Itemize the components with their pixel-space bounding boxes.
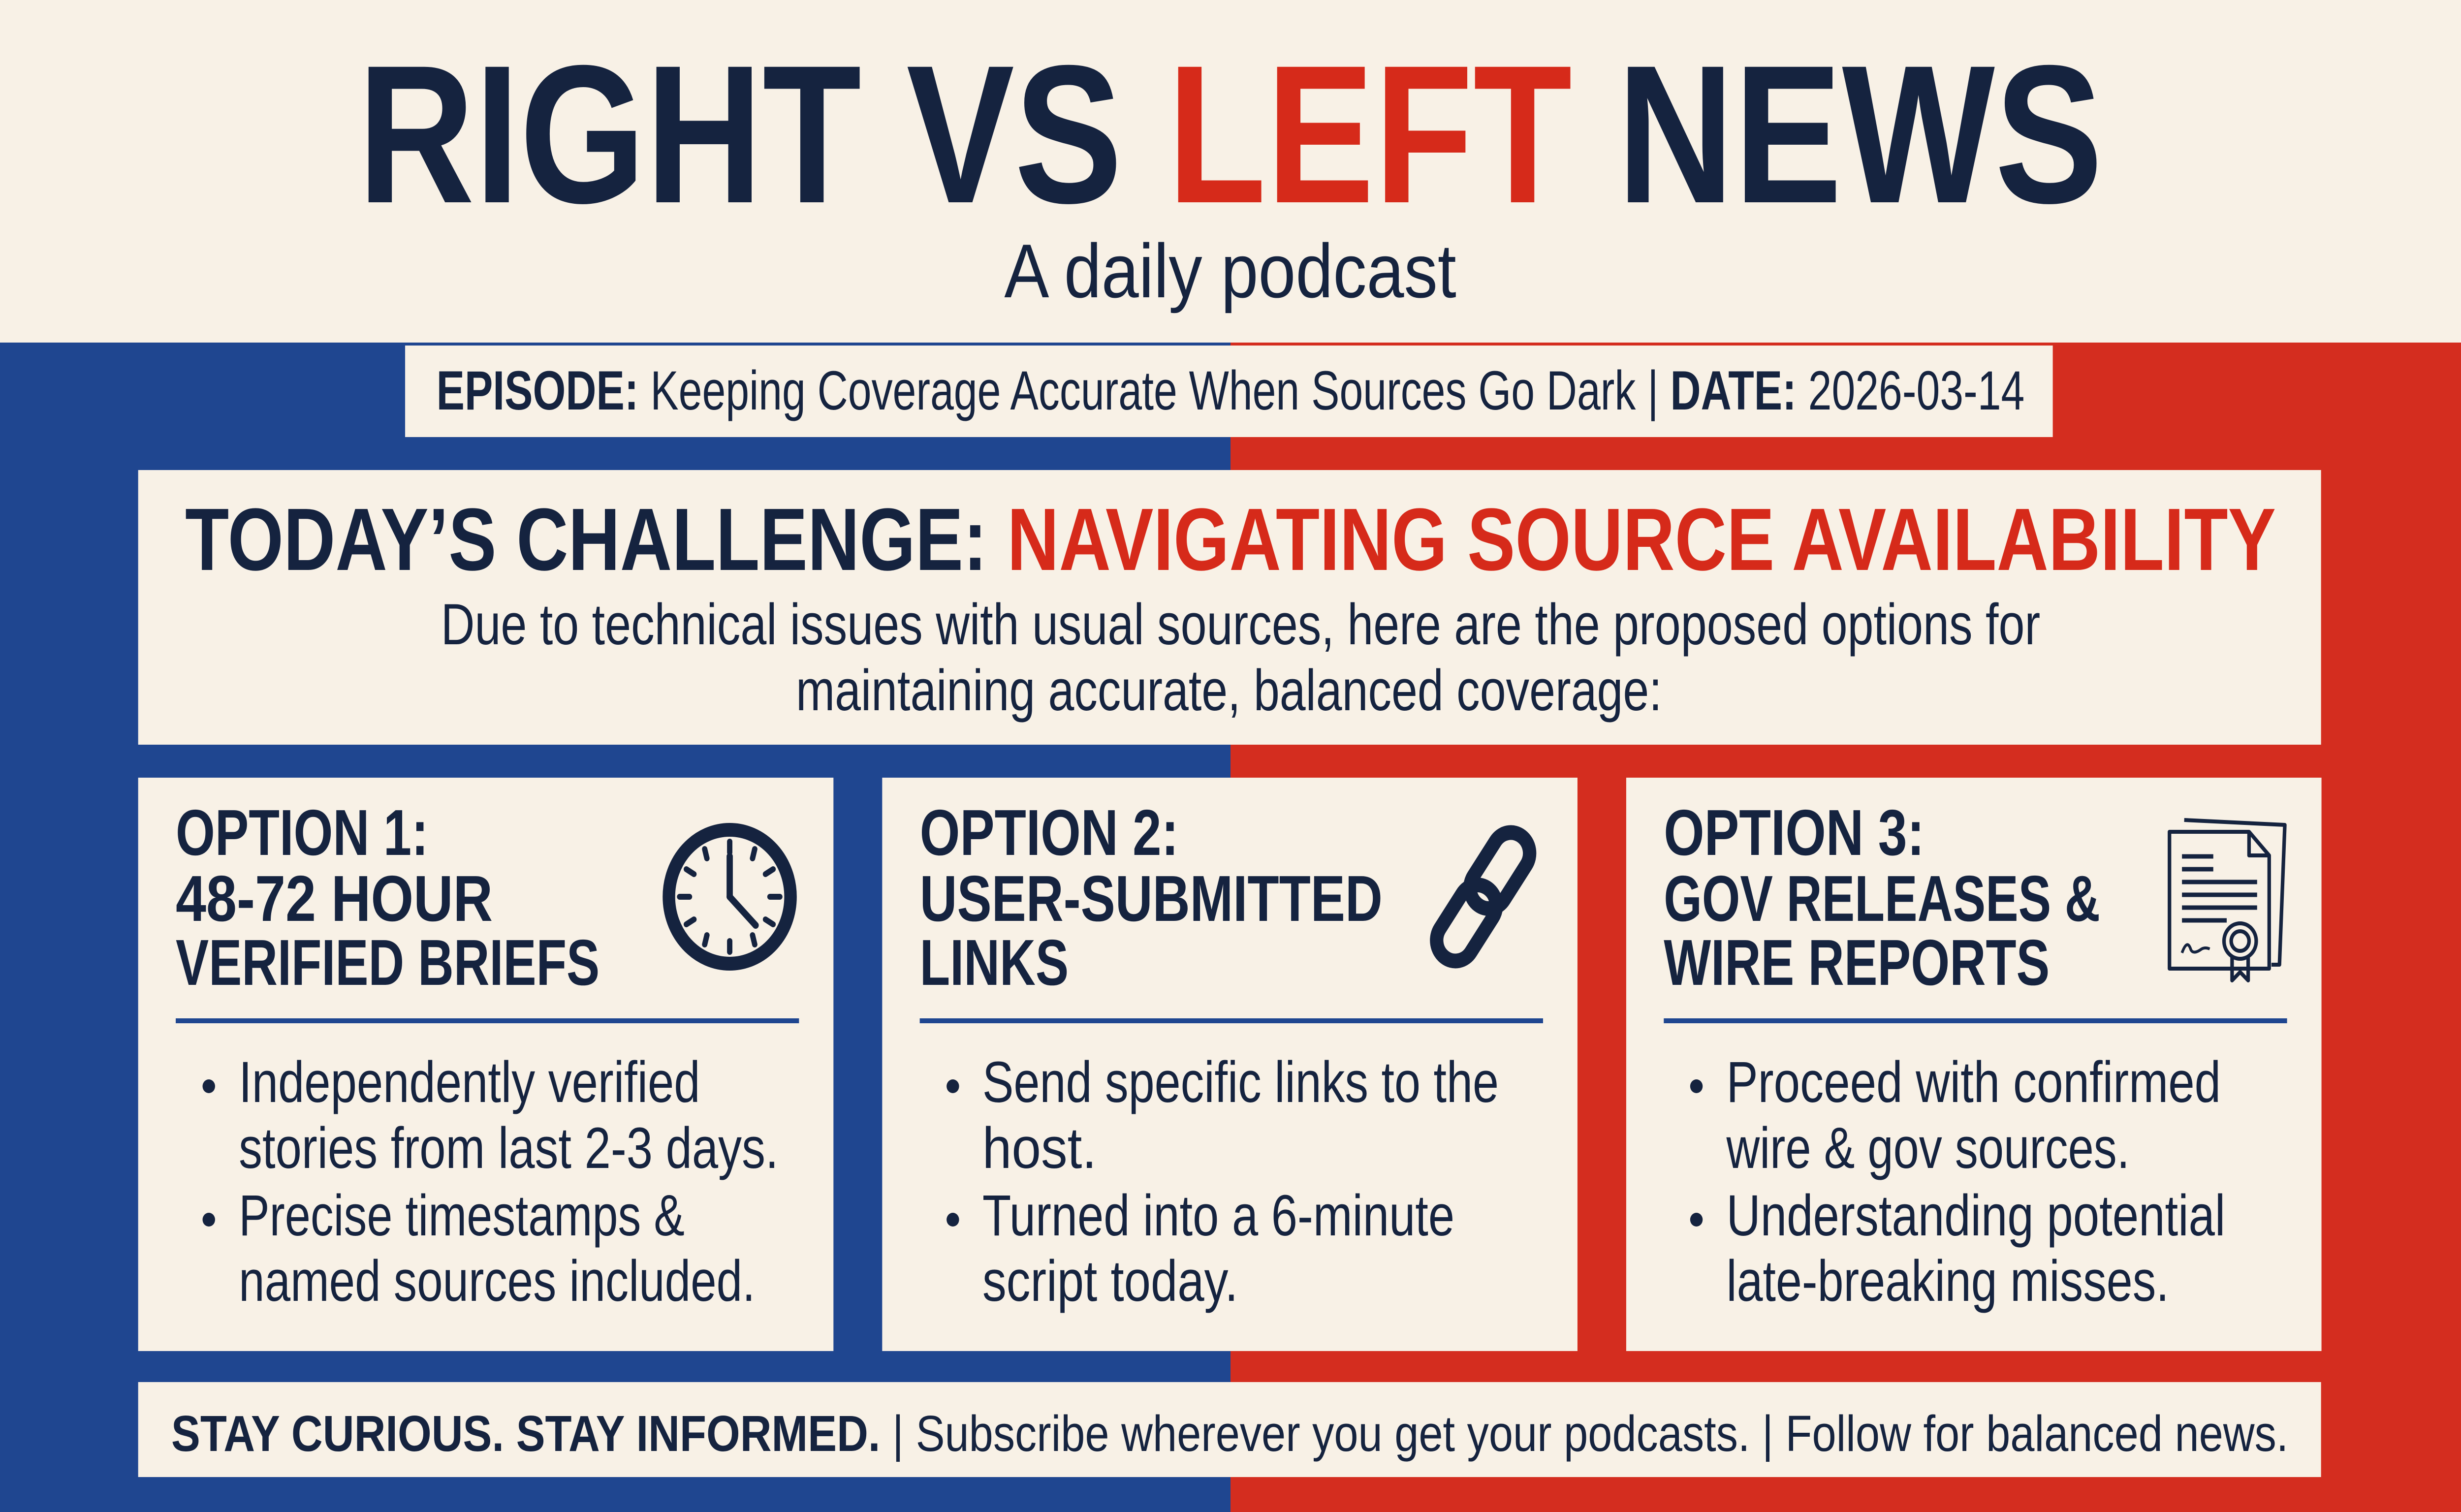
- episode text: EPISODE: Keeping Coverage Accurate When Sources Go Dark | DATE: 2026-03-14: [437, 359, 2024, 421]
- panel: option 3: [1626, 778, 2322, 1351]
- option 1 heading: [176, 796, 599, 999]
- challenge description: [441, 592, 2040, 723]
- panel: option 2: [882, 778, 1578, 1351]
- footer bar: [138, 1382, 2321, 1477]
- option 2 heading: LINKS: [920, 926, 1069, 999]
- option 3 heading: GOV RELEASES &: [1664, 862, 2100, 935]
- background: cream top band: [0, 0, 2461, 343]
- option 2 heading: OPTION 2:: [920, 796, 1179, 869]
- option 3 heading: [1664, 796, 2100, 999]
- option 2 bullets: Send specific links to the: [982, 1049, 1499, 1114]
- challenge description: Due to technical issues with usual sources, here are the proposed options for: [441, 592, 2040, 657]
- background: blue left half: [0, 343, 1230, 1512]
- icon: chain link: [1429, 824, 1537, 969]
- divider: [176, 1018, 799, 1023]
- option 1 bullets: named sources included.: [239, 1248, 755, 1313]
- option 2 bullets: host.: [982, 1115, 1097, 1180]
- option 3 bullets: [1690, 1049, 2225, 1313]
- divider: [1664, 1018, 2287, 1023]
- footer text: STAY CURIOUS. STAY INFORMED. | Subscribe wherever you get your podcasts. | Follow for balanced news.: [171, 1405, 2288, 1462]
- option 3 bullets: late-breaking misses.: [1726, 1248, 2169, 1313]
- panel: today's challenge: [138, 470, 2321, 745]
- option 2 bullets: [947, 1049, 1499, 1313]
- option 3 heading: OPTION 3:: [1664, 796, 1925, 869]
- option 2 heading: USER-SUBMITTED: [920, 862, 1383, 935]
- icon: certified document: [2170, 820, 2285, 980]
- divider: [920, 1018, 1543, 1023]
- option 1 heading: VERIFIED BRIEFS: [176, 926, 599, 999]
- challenge description: maintaining accurate, balanced coverage:: [796, 658, 1662, 723]
- option 1 bullets: [203, 1049, 779, 1313]
- option 1 heading: 48-72 HOUR: [176, 862, 493, 935]
- panel: option 1: [138, 778, 833, 1351]
- option 3 bullets: Understanding potential: [1726, 1183, 2225, 1248]
- option 1 heading: OPTION 1:: [176, 796, 428, 869]
- option 1 bullets: stories from last 2-3 days.: [239, 1115, 779, 1180]
- option 1 bullets: Precise timestamps &: [239, 1183, 685, 1248]
- challenge heading: TODAY’S CHALLENGE: NAVIGATING SOURCE AVAILABILITY: [185, 490, 2276, 589]
- option 3 bullets: wire & gov sources.: [1726, 1115, 2130, 1180]
- option 2 bullets: Turned into a 6-minute: [982, 1183, 1454, 1248]
- option 3 heading: WIRE REPORTS: [1664, 926, 2050, 999]
- episode bar: [405, 346, 2053, 437]
- icon: clock: [669, 830, 790, 964]
- subtitle: A daily podcast: [1004, 229, 1456, 314]
- option 2 bullets: script today.: [982, 1248, 1238, 1313]
- option 2 heading: [920, 796, 1383, 999]
- title: RIGHT VS LEFT NEWS: [358, 24, 2103, 244]
- option 1 bullets: Independently verified: [239, 1049, 700, 1114]
- background: red right half: [1230, 343, 2461, 1512]
- option 3 bullets: Proceed with confirmed: [1726, 1049, 2221, 1114]
